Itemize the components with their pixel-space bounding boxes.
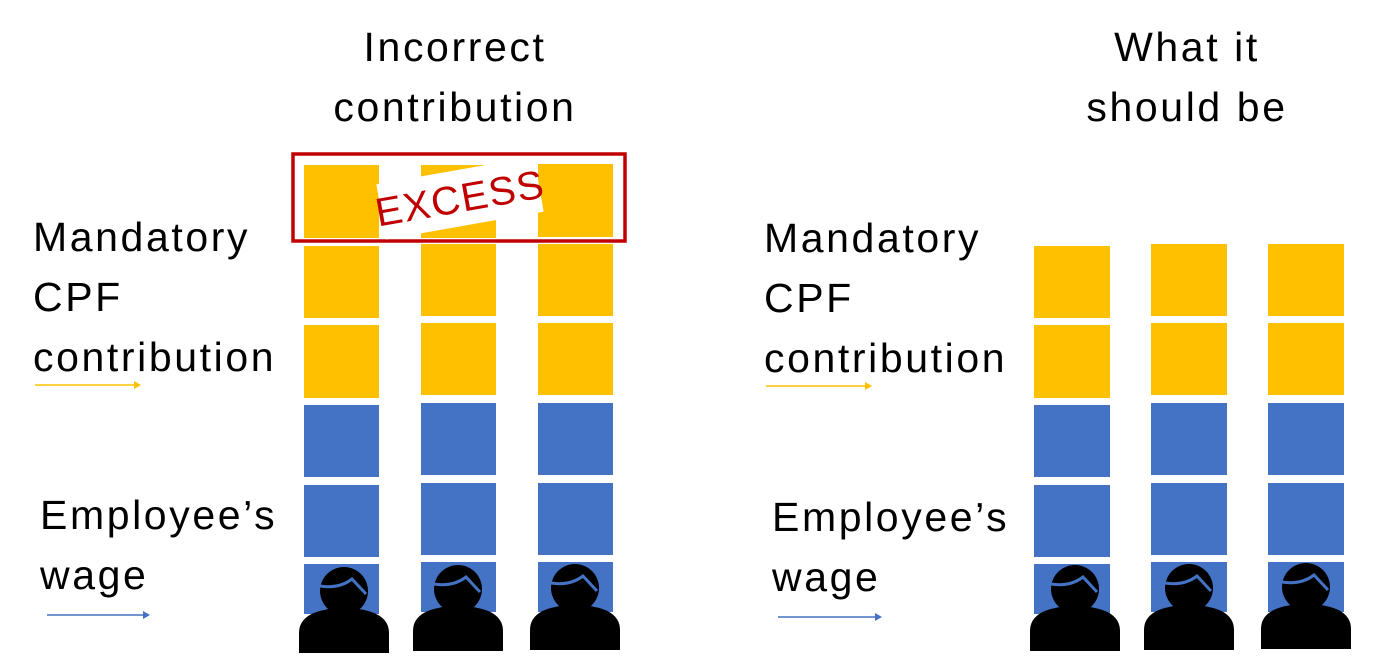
label: right employee wage bbox=[772, 494, 1009, 600]
title: incorrect contribution bbox=[333, 24, 577, 130]
title: what it should be: What it bbox=[1114, 24, 1260, 70]
right people icons bbox=[1030, 563, 1351, 651]
title: what it should be bbox=[1086, 24, 1288, 130]
label: left employee wage bbox=[40, 492, 277, 598]
arrow: left blue bbox=[47, 611, 150, 619]
label: left mandatory CPF: Mandatory bbox=[33, 214, 250, 260]
left people icons bbox=[299, 564, 620, 653]
label: right mandatory CPF bbox=[764, 215, 1007, 381]
label: left mandatory CPF: contribution bbox=[33, 334, 276, 380]
label: right mandatory CPF: contribution bbox=[764, 335, 1007, 381]
label: right employee wage: wage bbox=[772, 554, 880, 600]
right stacks bbox=[1034, 244, 1344, 614]
title: what it should be: should be bbox=[1086, 84, 1288, 130]
label: left mandatory CPF bbox=[33, 214, 276, 380]
label: right employee wage: Employee’s bbox=[772, 494, 1009, 540]
label: left employee wage: Employee’s bbox=[40, 492, 277, 538]
label: left mandatory CPF: CPF bbox=[33, 274, 123, 320]
left stacks bbox=[304, 164, 613, 614]
arrow: right yellow bbox=[766, 382, 872, 390]
excess callout: EXCESS bbox=[372, 162, 548, 236]
label: right mandatory CPF: CPF bbox=[764, 275, 854, 321]
arrow: right blue bbox=[778, 613, 882, 621]
label: left employee wage: wage bbox=[40, 552, 148, 598]
label: right mandatory CPF: Mandatory bbox=[764, 215, 981, 261]
title: incorrect contribution: contribution bbox=[333, 84, 577, 130]
arrow: left yellow bbox=[35, 381, 141, 389]
title: incorrect contribution: Incorrect bbox=[364, 24, 546, 70]
excess callout bbox=[293, 154, 625, 241]
